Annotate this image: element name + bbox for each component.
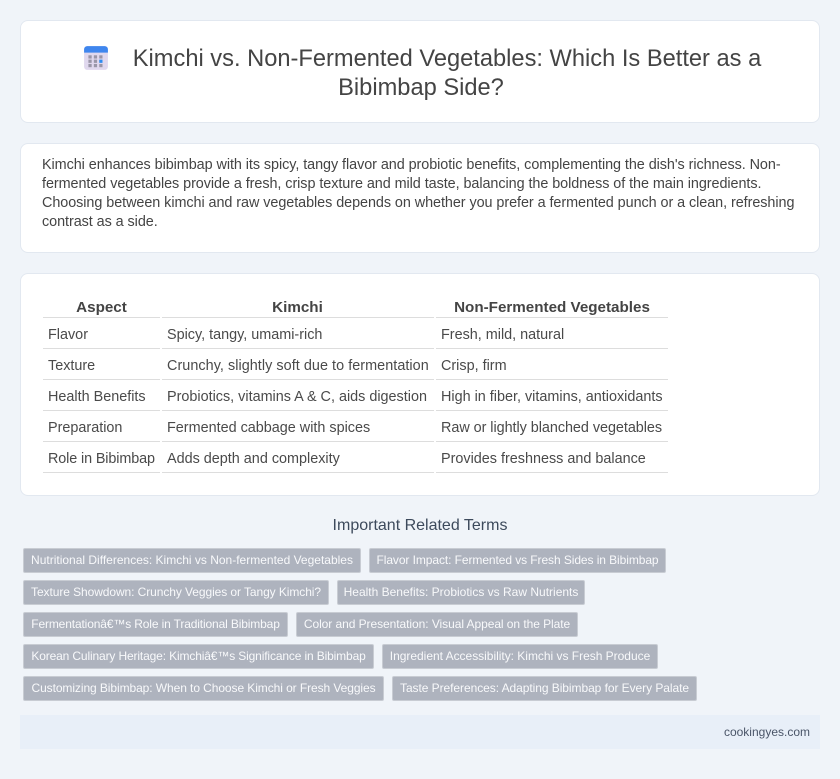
tag [23, 612, 288, 637]
tag [392, 676, 697, 701]
text block: description: fermented vegetables provide a fresh, crisp texture and mild taste, balancing the boldness of the main ingredients. [42, 176, 761, 192]
row: preparation: Preparation [48, 420, 122, 436]
tag: Fermentationâ€™s Role in Traditional Bibimbap [31, 617, 280, 631]
row: texture: Texture [48, 358, 95, 374]
tag [382, 644, 658, 669]
text block: description: Choosing between kimchi and raw vegetables depends on whether you prefer a fermented punch or a clean, refreshing [42, 195, 794, 211]
text block: description [42, 156, 794, 230]
tag: Ingredient Accessibility: Kimchi vs Fresh Produce [390, 649, 650, 663]
tag: Nutritional Differences: Kimchi vs Non-fermented Vegetables [31, 553, 353, 567]
row: flavor: Fresh, mild, natural [441, 327, 564, 343]
tag [369, 548, 666, 573]
tag: Texture Showdown: Crunchy Veggies or Tangy Kimchi? [31, 585, 321, 599]
tag: Health Benefits: Probiotics vs Raw Nutrients [344, 585, 578, 599]
header row: Kimchi [272, 299, 323, 316]
row: texture: Crunchy, slightly soft due to fermentation [167, 358, 429, 374]
footer [20, 715, 820, 749]
icon: calendar [84, 46, 108, 70]
tag [23, 580, 329, 605]
row: health benefits: Health Benefits [48, 389, 146, 405]
tag: Customizing Bibimbap: When to Choose Kimchi or Fresh Veggies [31, 681, 376, 695]
tag: Color and Presentation: Visual Appeal on the Plate [304, 617, 570, 631]
tag: Korean Culinary Heritage: Kimchiâ€™s Significance in Bibimbap [31, 649, 366, 663]
tag: Flavor Impact: Fermented vs Fresh Sides in Bibimbap [376, 553, 659, 567]
row: texture: Crisp, firm [441, 358, 507, 374]
row: flavor: Spicy, tangy, umami-rich [167, 327, 322, 343]
panel: comparison table [20, 273, 820, 496]
tag [23, 676, 384, 701]
footer text: cookingyes.com [724, 725, 810, 739]
tags: related terms [23, 548, 697, 701]
table [43, 299, 668, 473]
text block: description: contrast as a side. [42, 214, 158, 230]
row: health benefits: Probiotics, vitamins A & C, aids digestion [167, 389, 427, 405]
row: role in bibimbap: Provides freshness and balance [441, 451, 646, 467]
row: health benefits: High in fiber, vitamins, antioxidants [441, 389, 663, 405]
header row: Non-Fermented Vegetables [454, 299, 650, 316]
row: flavor [48, 327, 564, 343]
tag [23, 644, 374, 669]
tag [23, 548, 361, 573]
row: preparation: Raw or lightly blanched vegetables [441, 420, 662, 436]
row: preparation [48, 420, 662, 436]
row: role in bibimbap: Adds depth and complexity [167, 451, 340, 467]
title [133, 46, 762, 100]
panel: header [20, 20, 820, 123]
title: Kimchi vs. Non-Fermented Vegetables: Which Is Better as a [133, 46, 761, 72]
row: health benefits [48, 389, 663, 405]
row: preparation: Fermented cabbage with spices [167, 420, 370, 436]
panel: description [20, 143, 820, 253]
row: texture [48, 358, 507, 374]
tag [296, 612, 578, 637]
row: role in bibimbap [48, 451, 646, 467]
heading: related terms: Important Related Terms [333, 517, 507, 534]
title: Bibimbap Side? [338, 74, 504, 100]
row: role in bibimbap: Role in Bibimbap [48, 451, 155, 467]
tag [337, 580, 585, 605]
header row [76, 299, 650, 316]
tag: Taste Preferences: Adapting Bibimbap for Every Palate [400, 681, 689, 695]
text block: description: Kimchi enhances bibimbap with its spicy, tangy flavor and probiotic benefits, complementing the dish's richness. Non- [42, 156, 781, 172]
header row: Aspect [76, 299, 127, 316]
row: flavor: Flavor [48, 327, 88, 343]
